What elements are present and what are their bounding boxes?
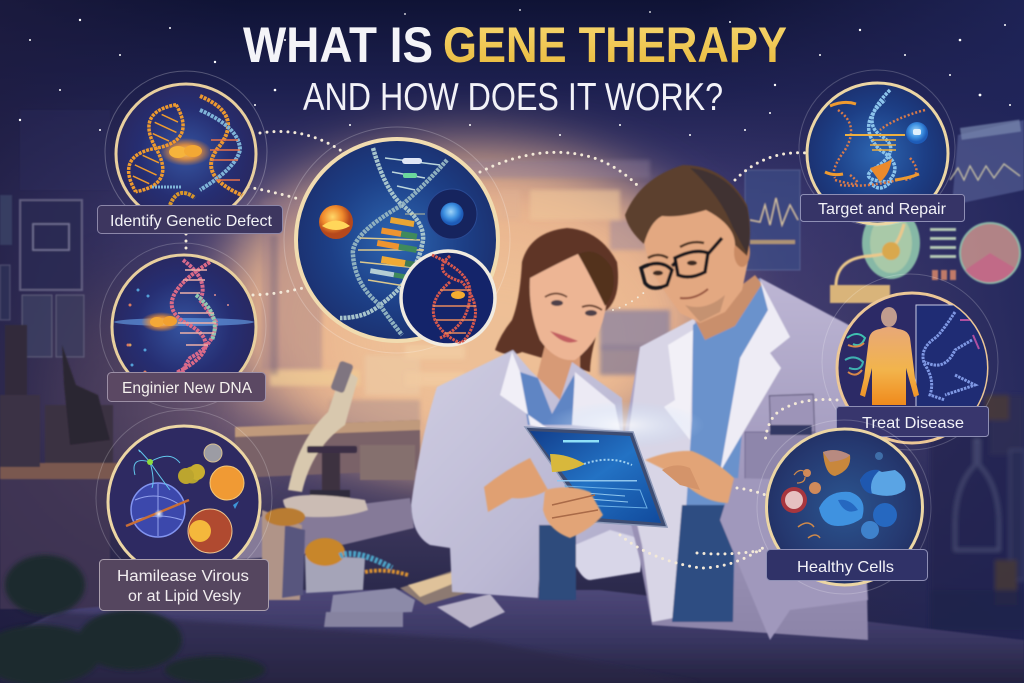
disc — [807, 83, 948, 224]
background: stars — [19, 9, 1011, 136]
glow above tablet — [545, 401, 705, 449]
outer halo ring — [822, 274, 998, 450]
head — [642, 205, 748, 323]
right dark glassware — [930, 395, 1024, 683]
tablet content — [550, 440, 647, 508]
mouth — [680, 289, 708, 298]
shirt — [672, 278, 768, 622]
disc — [837, 293, 987, 443]
human body and DNA — [845, 305, 991, 415]
lab shelves behind the scientists — [262, 160, 670, 426]
microscope — [283, 361, 368, 517]
label: treat disease: Treat Disease — [862, 415, 964, 432]
label: engineer new DNA: Enginier New DNA — [122, 380, 252, 397]
lapels — [500, 352, 550, 430]
label: harmless virus or lipid vesicle: or at Lipid Vesly — [128, 588, 241, 605]
stubble — [685, 295, 725, 322]
plant silhouettes — [0, 555, 265, 683]
neck — [535, 345, 580, 418]
DNA strands — [825, 90, 928, 188]
label: target and repair — [800, 194, 964, 222]
disc — [296, 139, 498, 341]
eyes and brows — [648, 242, 704, 258]
panel: harmless virus or lipid vesicle — [96, 410, 272, 559]
label: target and repair: Target and Repair — [818, 201, 947, 218]
bench behind microscope — [232, 420, 420, 560]
hair — [495, 228, 618, 372]
label: identify genetic defect: Identify Genetic Defect — [110, 213, 273, 230]
scientist: man in lab coat — [624, 165, 868, 640]
DNA helix — [114, 258, 254, 372]
man's pointing hand — [645, 451, 734, 503]
glasses — [641, 238, 722, 288]
sleeve — [720, 478, 868, 640]
title: AND HOW DOES IT WORK? — [303, 76, 723, 119]
connector: dotted paths between steps — [186, 132, 807, 310]
tablet screen — [530, 431, 661, 523]
coat — [411, 350, 645, 598]
panel: healthy cells — [757, 420, 931, 594]
panel: engineer new DNA — [100, 243, 266, 409]
panel: treat disease — [822, 274, 998, 450]
panel: target and repair — [799, 70, 955, 226]
DNA helix — [319, 148, 447, 335]
DNA helices — [120, 96, 244, 205]
shirt — [520, 372, 577, 425]
outer halo ring — [105, 71, 267, 233]
woman's holding hand — [543, 487, 603, 538]
outer halo ring — [799, 70, 955, 226]
face — [530, 254, 606, 360]
eyes and mouth — [545, 294, 567, 297]
disc — [108, 426, 260, 578]
woman's pointing hand — [484, 458, 548, 512]
neck — [695, 275, 762, 340]
label: healthy cells: Healthy Cells — [797, 559, 894, 576]
inset: damaged DNA — [401, 251, 495, 346]
blue sphere medallion — [405, 189, 477, 239]
vector particles — [126, 444, 244, 553]
disc — [116, 84, 256, 224]
left wall charts — [0, 110, 110, 357]
panel: central gene editing view — [284, 127, 510, 353]
title — [243, 17, 787, 119]
desk in foreground — [0, 555, 1024, 683]
outer halo ring — [757, 420, 931, 594]
disc — [112, 255, 256, 399]
hair — [625, 165, 750, 256]
disc — [766, 429, 922, 585]
cells — [781, 450, 906, 539]
pocket — [745, 432, 815, 482]
label: identify genetic defect — [98, 206, 282, 234]
outer halo ring — [284, 127, 510, 353]
title: GENE THERAPY — [443, 17, 787, 73]
left counter with instruments — [0, 325, 240, 609]
label: treat disease — [836, 406, 988, 436]
outer halo ring — [96, 410, 272, 586]
label: harmless virus or lipid vesicle: Hamilease Virous — [117, 568, 249, 585]
label: harmless virus or lipid vesicle — [100, 560, 268, 610]
outer halo ring — [100, 243, 266, 409]
label: engineer new DNA — [108, 372, 266, 402]
tablet body — [525, 427, 667, 527]
lapels — [720, 280, 790, 472]
desk props: boxes, DNA models and papers — [250, 508, 505, 628]
orange ball — [319, 205, 353, 239]
scientist: woman in lab coat — [411, 228, 645, 600]
title: WHAT IS — [243, 17, 433, 73]
connector: dotted paths over the coats — [620, 400, 837, 568]
coat — [625, 278, 868, 640]
label: healthy cells — [766, 550, 928, 580]
panel: identify genetic defect — [105, 71, 267, 233]
right wall monitors — [745, 120, 1024, 303]
hands and tablet — [484, 401, 734, 538]
